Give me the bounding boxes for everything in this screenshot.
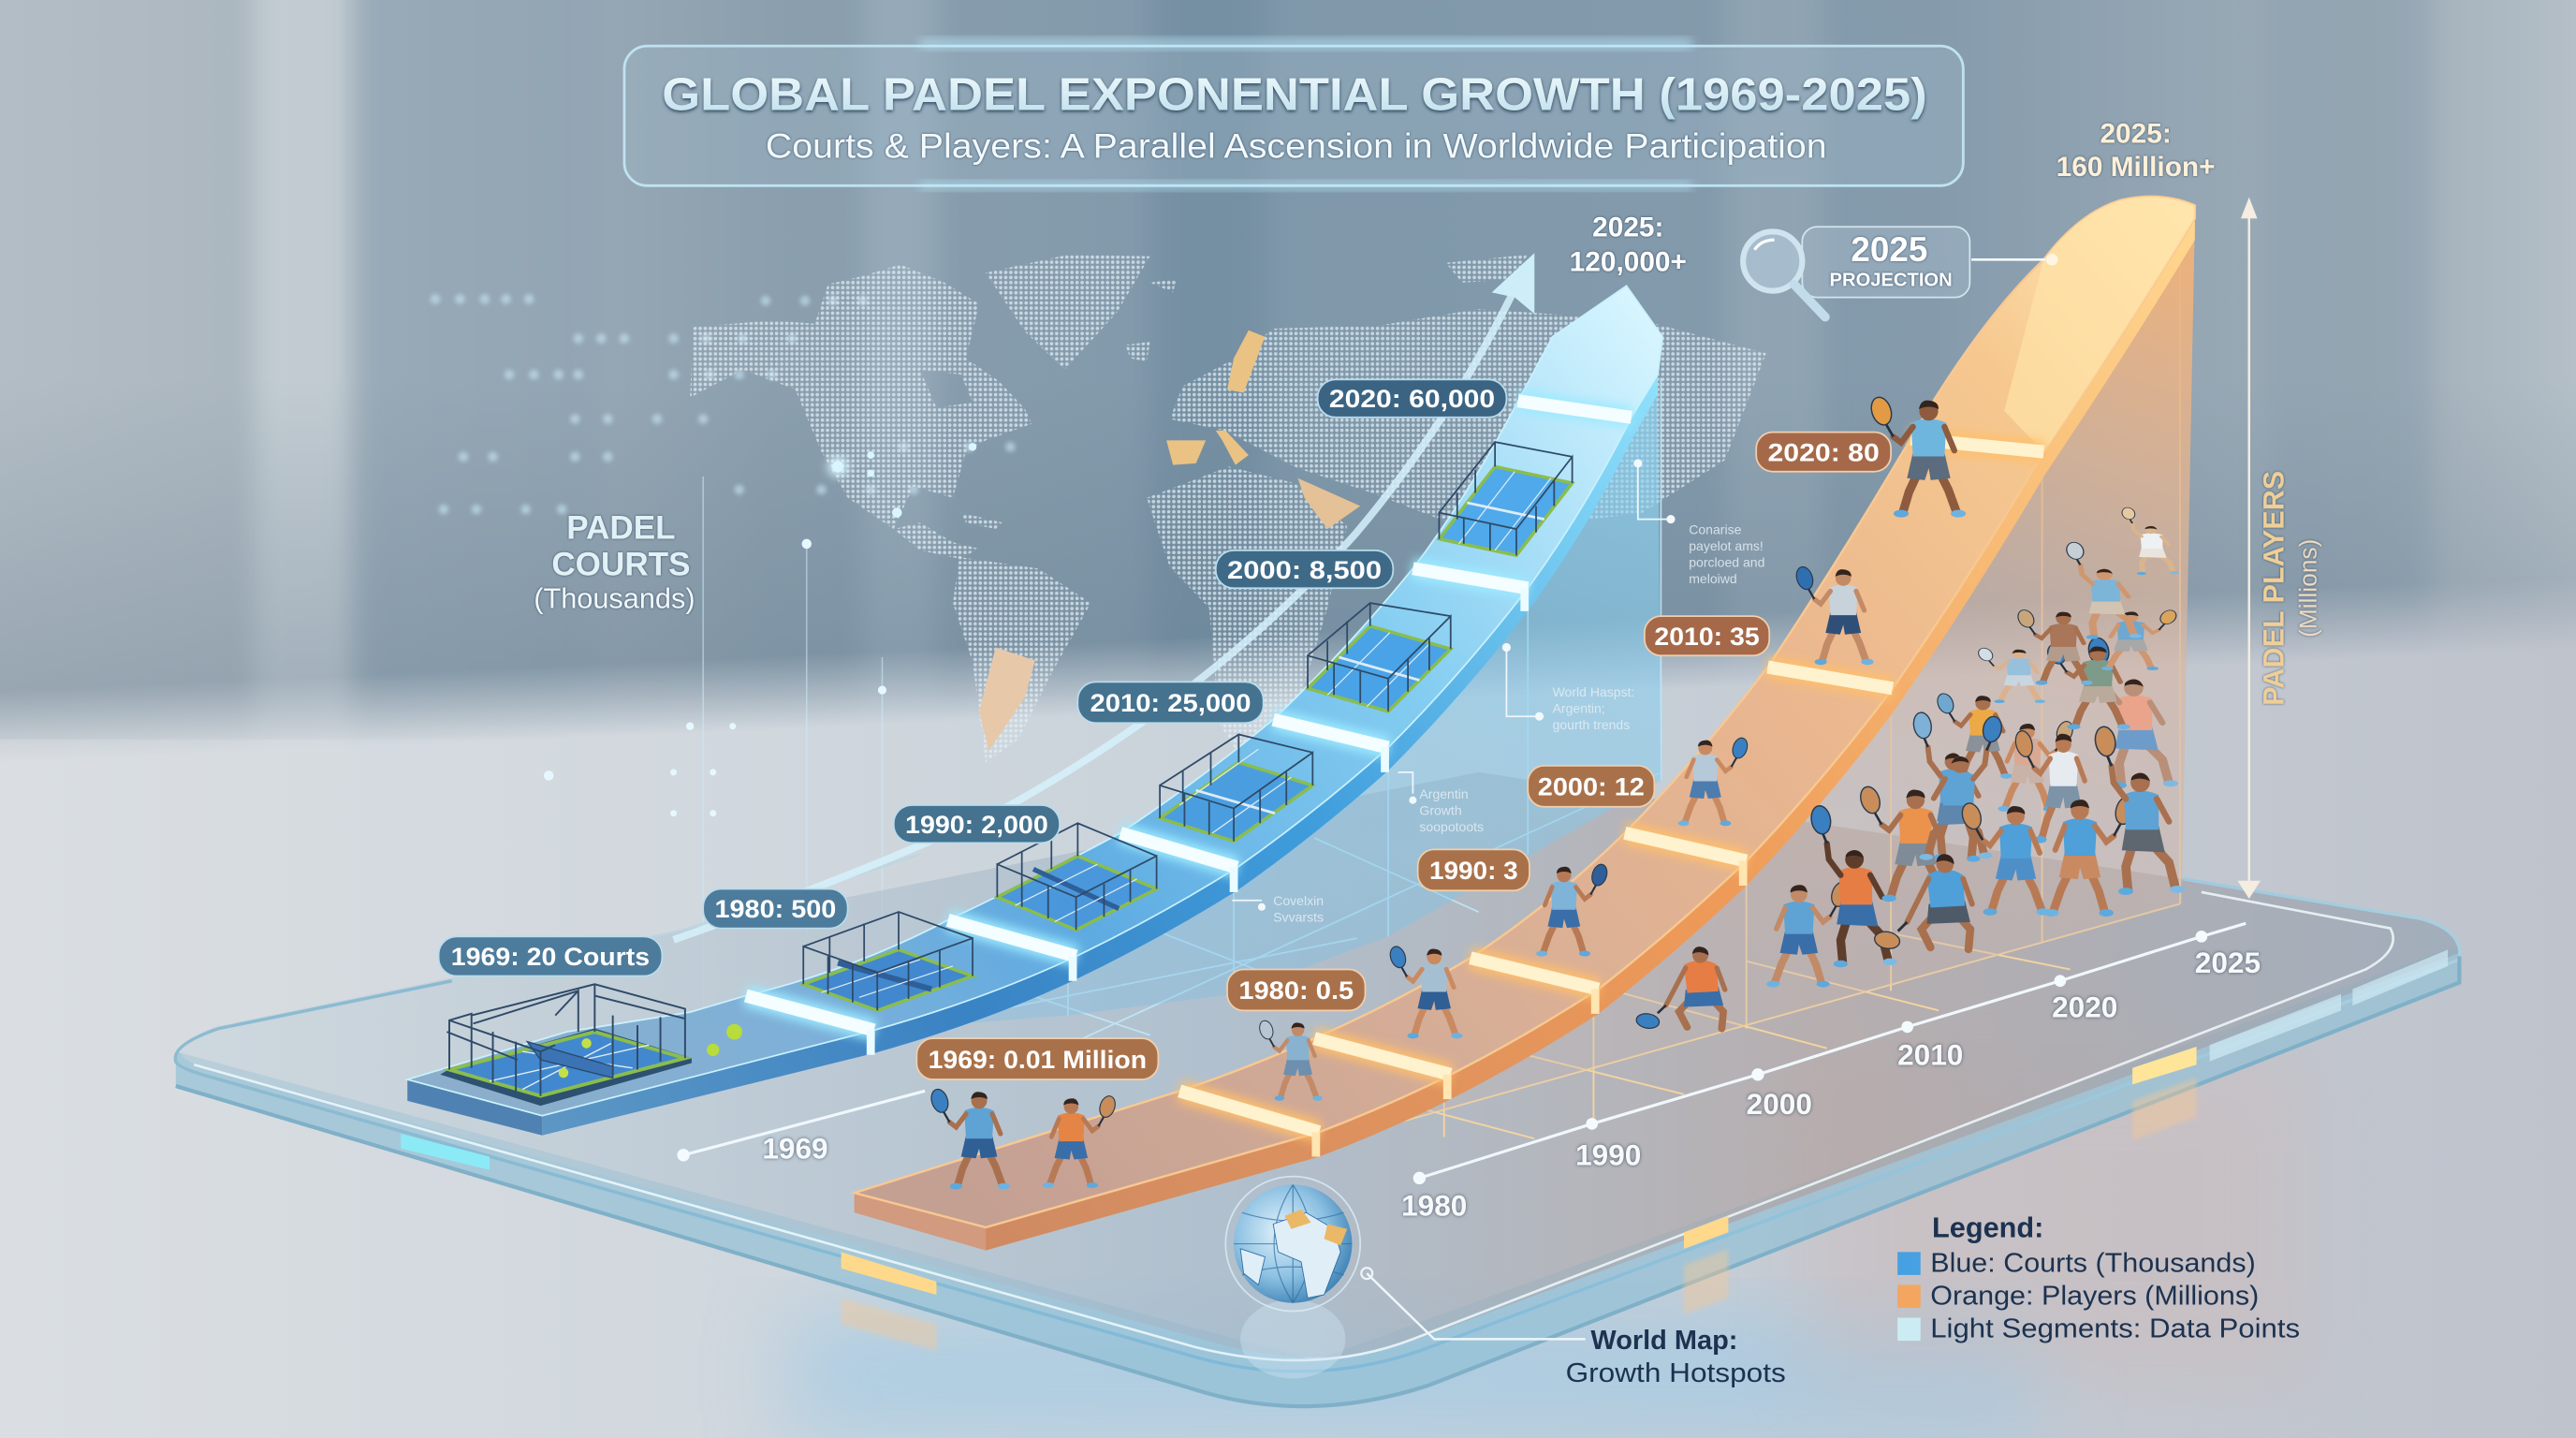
pill 1980 courts: [703, 888, 848, 929]
note: conarise: payelot ams!: [1689, 538, 1764, 553]
year label 1990: 1990: [1575, 1137, 1641, 1171]
pill 1969 courts: [439, 936, 662, 976]
axis timeline: [677, 923, 2261, 1223]
platform: cyan light strip: [401, 1134, 490, 1170]
platform: glass ribs right corner: [2210, 949, 2448, 1062]
pill 1969 courts: 1969: 20 Courts: [451, 942, 650, 971]
orange value pills: [916, 433, 1891, 1079]
left axis label: (Thousands): [534, 581, 695, 614]
map: highlighted Argentina: [979, 647, 1035, 751]
pill 2000 courts: [1216, 550, 1393, 588]
pill 2010 players: 2010: 35: [1654, 622, 1760, 651]
legend: orange swatch: [1897, 1284, 1921, 1308]
note: conarise: meloiwd: [1689, 571, 1737, 586]
right axis label: PADEL PLAYERS: [2257, 471, 2291, 706]
pill 2020 players: [1756, 433, 1891, 472]
map: glowing hotspots: [828, 443, 976, 518]
note: Argentina growth: soopotoots: [1419, 819, 1484, 834]
title panel: [624, 39, 1963, 189]
note: world hotspots: Argentin;: [1553, 701, 1605, 716]
left axis label: PADEL: [566, 510, 676, 547]
map: highlighted Arabia: [1298, 478, 1360, 529]
globe icon: [1225, 1177, 1360, 1378]
legend: blue swatch: [1897, 1252, 1921, 1275]
left axis label: COURTS: [551, 546, 691, 582]
pill 2000 courts: 2000: 8,500: [1227, 555, 1382, 584]
pill 1990 players: 1990: 3: [1429, 856, 1518, 885]
court 2000: [1160, 734, 1312, 842]
title: GLOBAL PADEL EXPONENTIAL GROWTH (1969-2025): [662, 70, 1927, 121]
pill 1990 players: [1418, 849, 1530, 890]
pill 1969 players: [916, 1038, 1158, 1079]
2025 projection badge: PROJECTION: [1830, 270, 1953, 290]
legend: orange text: Orange: Players (Millions): [1930, 1281, 2259, 1311]
right axis label: (Millions): [2294, 539, 2322, 638]
crowd of players: [1635, 506, 2185, 1030]
ribbon glowing data segments: [746, 401, 1632, 1055]
platform: floor reflections: [842, 1078, 2197, 1351]
legend: [1897, 1211, 2300, 1344]
year label 2010: 2010: [1897, 1037, 1963, 1071]
chart wall: blue courts: [874, 374, 1661, 1030]
platform: amber light strip right: [2132, 1047, 2197, 1084]
platform: amber light strip middle: [1684, 1216, 1728, 1249]
world map callout: World Map:: [1590, 1326, 1737, 1356]
pill 2000 players: [1528, 766, 1654, 807]
court 2020: [1439, 442, 1573, 555]
pill 1980 players: [1227, 969, 1365, 1010]
right vertical double arrow: [2237, 198, 2261, 899]
balls on court: [559, 1038, 592, 1078]
year label 1969: 1969: [762, 1131, 828, 1165]
world map callout: [1361, 1268, 1786, 1388]
legend: blue text: Blue: Courts (Thousands): [1930, 1248, 2256, 1278]
year label 2000: 2000: [1747, 1087, 1812, 1121]
data dots: background: [431, 294, 1016, 514]
year label 1980: 1980: [1401, 1189, 1467, 1223]
ribbon glowing data segments: [1179, 439, 2043, 1157]
court 1990: [997, 823, 1157, 930]
floor grid: courts: [838, 378, 1661, 1068]
map: highlighted Sweden: [1227, 330, 1265, 392]
pill 1969 players: 1969: 0.01 Million: [929, 1045, 1147, 1074]
world map: dotted continents: [690, 255, 1766, 772]
pill 2000 players: 2000: 12: [1538, 771, 1645, 800]
pill 2020 players: 2020: 80: [1767, 437, 1880, 466]
callout notes: [1232, 459, 1764, 925]
courts 2025 total: 120,000+: [1570, 247, 1687, 278]
court 1980: [803, 912, 973, 1010]
platform: amber light strip left: [842, 1252, 936, 1295]
icon: magnifier: [1743, 231, 1825, 317]
glowing data pillars: [544, 477, 886, 1051]
tennis balls: [707, 1024, 742, 1056]
note: coverage: Svvarsts: [1273, 910, 1324, 925]
left axis label: [534, 510, 695, 614]
legend: light text: Light Segments: Data Points: [1930, 1314, 2300, 1344]
pill 1980 players: 1980: 0.5: [1238, 976, 1354, 1005]
court 1969: [440, 984, 692, 1106]
year label 2025: 2025: [2195, 946, 2261, 979]
arrow: courts growth curve: [674, 253, 1534, 940]
map: highlighted Spain: [1166, 440, 1206, 465]
courts 2025 total: 2025:: [1592, 213, 1663, 243]
pill 1980 courts: 1980: 500: [714, 894, 836, 923]
2025 projection badge: 2025: [1851, 230, 1927, 269]
legend: Legend:: [1932, 1211, 2043, 1244]
pill 2020 courts: 2020: 60,000: [1329, 384, 1495, 413]
pill 2010 players: [1645, 616, 1769, 655]
note: world hotspots: gourth trends: [1553, 717, 1630, 732]
note: conarise: porcloed and: [1689, 554, 1764, 569]
chart wall: orange players: [1311, 218, 2195, 1147]
glass platform: [175, 772, 2460, 1406]
note: conarise: Conarise: [1689, 521, 1741, 536]
pill 2010 courts: [1077, 682, 1264, 723]
players 2025 total: 160 Million+: [2056, 152, 2216, 183]
floor grid: players: [1311, 222, 2180, 1147]
pill 2020 courts: [1318, 379, 1506, 418]
year label 2020: 2020: [2052, 990, 2117, 1023]
map: highlighted Italy: [1216, 431, 1249, 465]
blue ribbon: courts: [407, 286, 1662, 1136]
note: world hotspots: World Haspst:: [1553, 684, 1634, 699]
world map callout: Growth Hotspots: [1566, 1358, 1786, 1388]
pill 2010 courts: 2010: 25,000: [1090, 688, 1251, 717]
note: Argentina growth: Growth: [1419, 802, 1462, 817]
blue value pills: [439, 379, 1506, 976]
note: coverage: Covelxin: [1273, 893, 1324, 908]
note: Argentina growth: Argentin: [1419, 786, 1469, 801]
orange ribbon: players: [855, 197, 2195, 1251]
pill 1990 courts: 1990: 2,000: [905, 810, 1048, 839]
legend: light swatch: [1897, 1318, 1921, 1341]
subtitle: Courts & Players: A Parallel Ascension in Worldwide Participation: [766, 126, 1827, 165]
players on the ribbon: [929, 395, 1966, 1189]
right axis label: [2257, 471, 2322, 706]
players 2025 total: 2025:: [2100, 119, 2172, 150]
2025 projection badge: [1743, 227, 2057, 317]
pill 1990 courts: [894, 805, 1060, 843]
court 2010: [1308, 603, 1451, 712]
